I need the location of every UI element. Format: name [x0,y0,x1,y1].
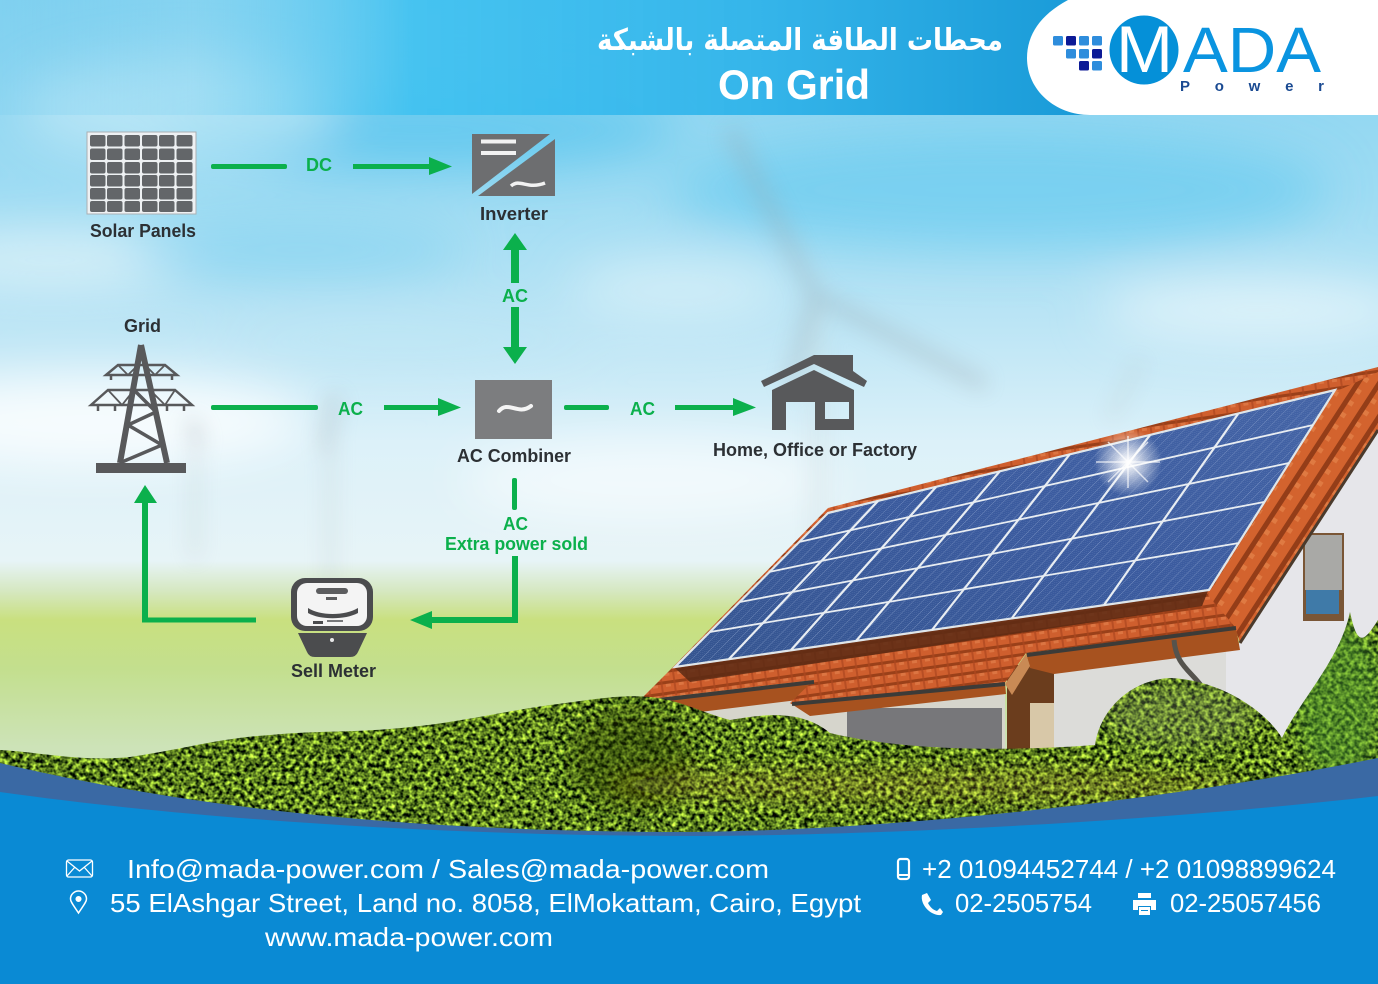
logo: ADA wordmark: ADA [1183,14,1321,86]
text: emails: Info@mada-power.com / Sales@mada-power.com [127,854,769,884]
text: mobile numbers: +2 01094452744 / +2 01098899624 [922,854,1336,884]
heading: On Grid: On Grid [718,61,870,108]
arrow: AC between inverter and combiner: AC [502,286,528,306]
logo panel [1027,0,1378,115]
solar array [675,390,1335,667]
text: fax: 02-25057456 [1170,888,1321,918]
label: sell meter: Sell Meter [291,661,376,681]
icon: AC combiner [475,380,552,439]
icon: location pin [70,891,86,913]
label: extra power sold: Extra power sold [445,534,588,554]
logo: pixel squares [1053,36,1102,70]
sun glare [1094,428,1162,496]
label: inverter: Inverter [480,204,548,224]
arrow: AC grid to combiner: AC [338,399,363,419]
label: home, office or factory: Home, Office or Factory [713,440,917,460]
eaves and gutters [642,628,1236,704]
upper window with shutter [1303,533,1344,621]
arrow: AC grid to combiner [211,398,461,419]
footer: blue panel [0,792,1378,984]
logo: Power wordmark: Power [1180,78,1324,95]
heading: arabic title: محطات الطاقة المتصلة بالشبكة [597,23,1003,58]
AC combiner node [457,380,571,466]
icon: solar panel [87,132,196,214]
label: grid: Grid [124,316,161,336]
icon: electricity meter [291,578,373,657]
icon: pylon [91,345,192,473]
label: AC combiner: AC Combiner [457,446,571,466]
hedge and bushes [0,612,1378,832]
home node [713,355,917,460]
panel frame lines [675,390,1335,667]
arrow: extra power sold [410,478,588,629]
header band [0,0,1378,115]
house walls [696,428,1378,780]
icon: house [761,355,867,430]
arrow: DC to inverter: DC [306,155,332,175]
footer contact details [66,854,1336,952]
house photo [640,367,1378,780]
text: address: 55 ElAshgar Street, Land no. 8058, ElMokattam, Cairo, Egypt [110,888,862,918]
logo: circle M: M [1116,12,1173,86]
text: phone: 02-2505754 [955,888,1092,918]
label: solar panels: Solar Panels [90,221,196,241]
eave soffits [640,627,1240,716]
arrow: DC to inverter [211,155,452,175]
grid node [91,316,192,473]
arrow: AC combiner to home: AC [630,399,655,419]
arrow: meter to grid [134,485,256,622]
icon: printer [1133,893,1156,915]
sell meter node [291,578,376,681]
roof with tiles [640,367,1378,703]
garage shutters [847,665,1054,765]
text: website: www.mada-power.com [264,922,553,952]
icon: phone [922,893,943,915]
label: AC: AC [503,514,528,534]
footer: slate wave [0,758,1378,984]
background: blurred wind turbines [190,130,1140,590]
arrow: AC combiner to home [564,398,756,419]
icon: email [66,860,92,877]
solar panels node [87,132,196,241]
arrow: AC between inverter and combiner [502,233,528,364]
icon: inverter [472,134,555,196]
shadow under panels [675,591,1208,682]
inverter node [472,134,555,224]
icon: mobile [898,859,909,879]
